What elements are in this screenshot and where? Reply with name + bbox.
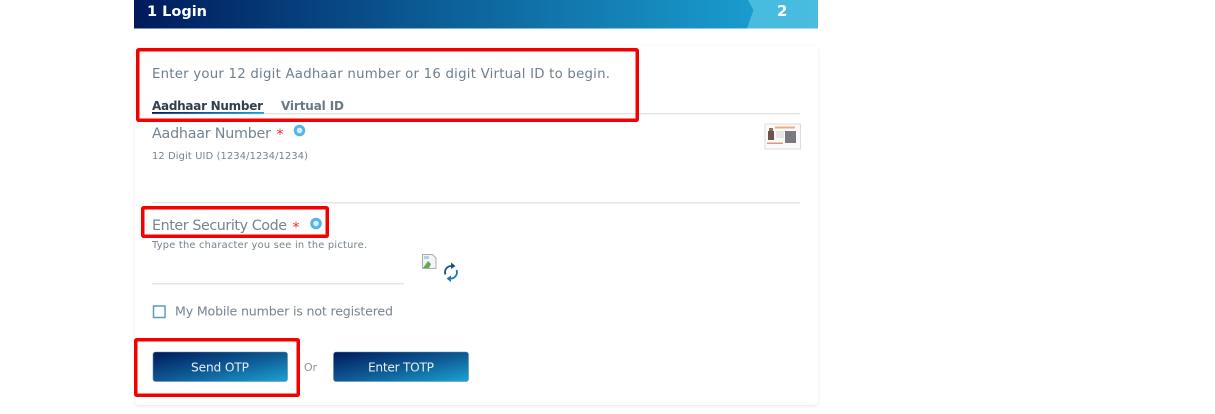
- text: or: Or: [304, 361, 317, 374]
- label: security code: Enter Security Code: [152, 218, 287, 234]
- icon: info aadhaar: [295, 126, 304, 135]
- tab: aadhaar number active: Aadhaar Number: [152, 99, 263, 113]
- label: aadhaar number: Aadhaar Number: [152, 126, 271, 142]
- heading: step 2: 2: [777, 2, 787, 20]
- callout: instructions highlight: [138, 50, 637, 120]
- icon: refresh captcha: [445, 262, 457, 282]
- text: uid hint: 12 Digit UID (1234/1234/1234): [152, 151, 308, 162]
- button: send otp: Send OTP: [191, 360, 249, 374]
- header: step bar: [134, 0, 818, 28]
- tab: virtual id: Virtual ID: [281, 99, 344, 113]
- icon: info security code: [312, 219, 320, 228]
- label: aadhaar number: *: [276, 127, 284, 143]
- tabs: id type: [152, 99, 800, 114]
- checkbox: mobile not registered: [154, 306, 165, 318]
- icon: aadhaar card thumbnail: [765, 124, 800, 149]
- heading: step 1 login: 1 Login: [147, 4, 207, 20]
- input line: aadhaar number: [152, 202, 800, 204]
- input line: security code: [152, 283, 404, 284]
- button: enter totp: [334, 352, 468, 382]
- label: security code: *: [292, 220, 300, 236]
- tab underline: [152, 112, 264, 114]
- icon: broken image: [422, 254, 436, 268]
- callout: security code highlight: [143, 208, 327, 236]
- text: instructions: Enter your 12 digit Aadhaar number or 16 digit Virtual ID to begin.: [152, 67, 610, 82]
- button: send otp: [153, 352, 288, 382]
- panel: form card: [135, 46, 818, 405]
- label: mobile not registered: My Mobile number is not registered: [175, 304, 393, 318]
- text: captcha hint: Type the character you see in the picture.: [151, 240, 367, 251]
- callout: send otp highlight: [136, 340, 298, 395]
- button: enter totp: Enter TOTP: [368, 360, 434, 374]
